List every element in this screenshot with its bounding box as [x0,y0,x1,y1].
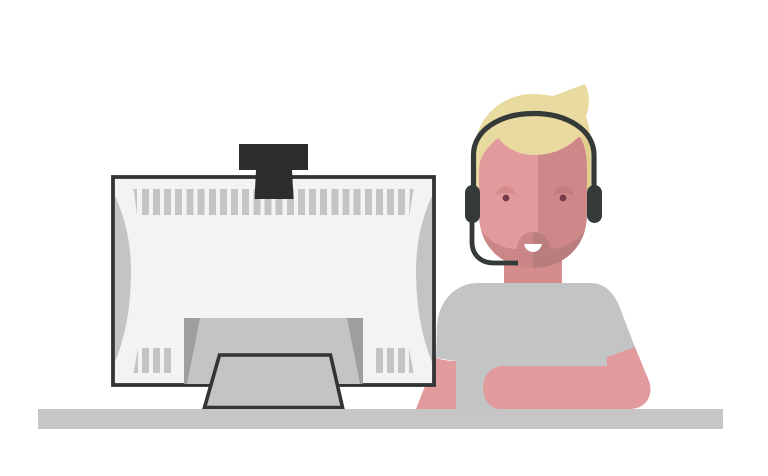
bottom vents [134,348,414,373]
hair [475,84,591,190]
person [416,84,650,409]
neck [504,258,562,283]
eyebrows [495,186,574,196]
beard [481,231,585,268]
mouth [524,244,542,252]
desk [38,409,723,429]
side shading [115,196,432,362]
face [479,137,587,268]
eyes [503,195,566,201]
stand shadows [184,318,363,384]
microphone boom [472,222,518,263]
webcam [239,144,308,199]
headset [465,114,602,263]
fringe [498,100,586,155]
screen back [113,177,434,385]
monitor [113,144,434,408]
stand base [204,355,342,408]
top vents [134,189,414,215]
stand neck [184,318,363,384]
body and arms [416,283,650,409]
